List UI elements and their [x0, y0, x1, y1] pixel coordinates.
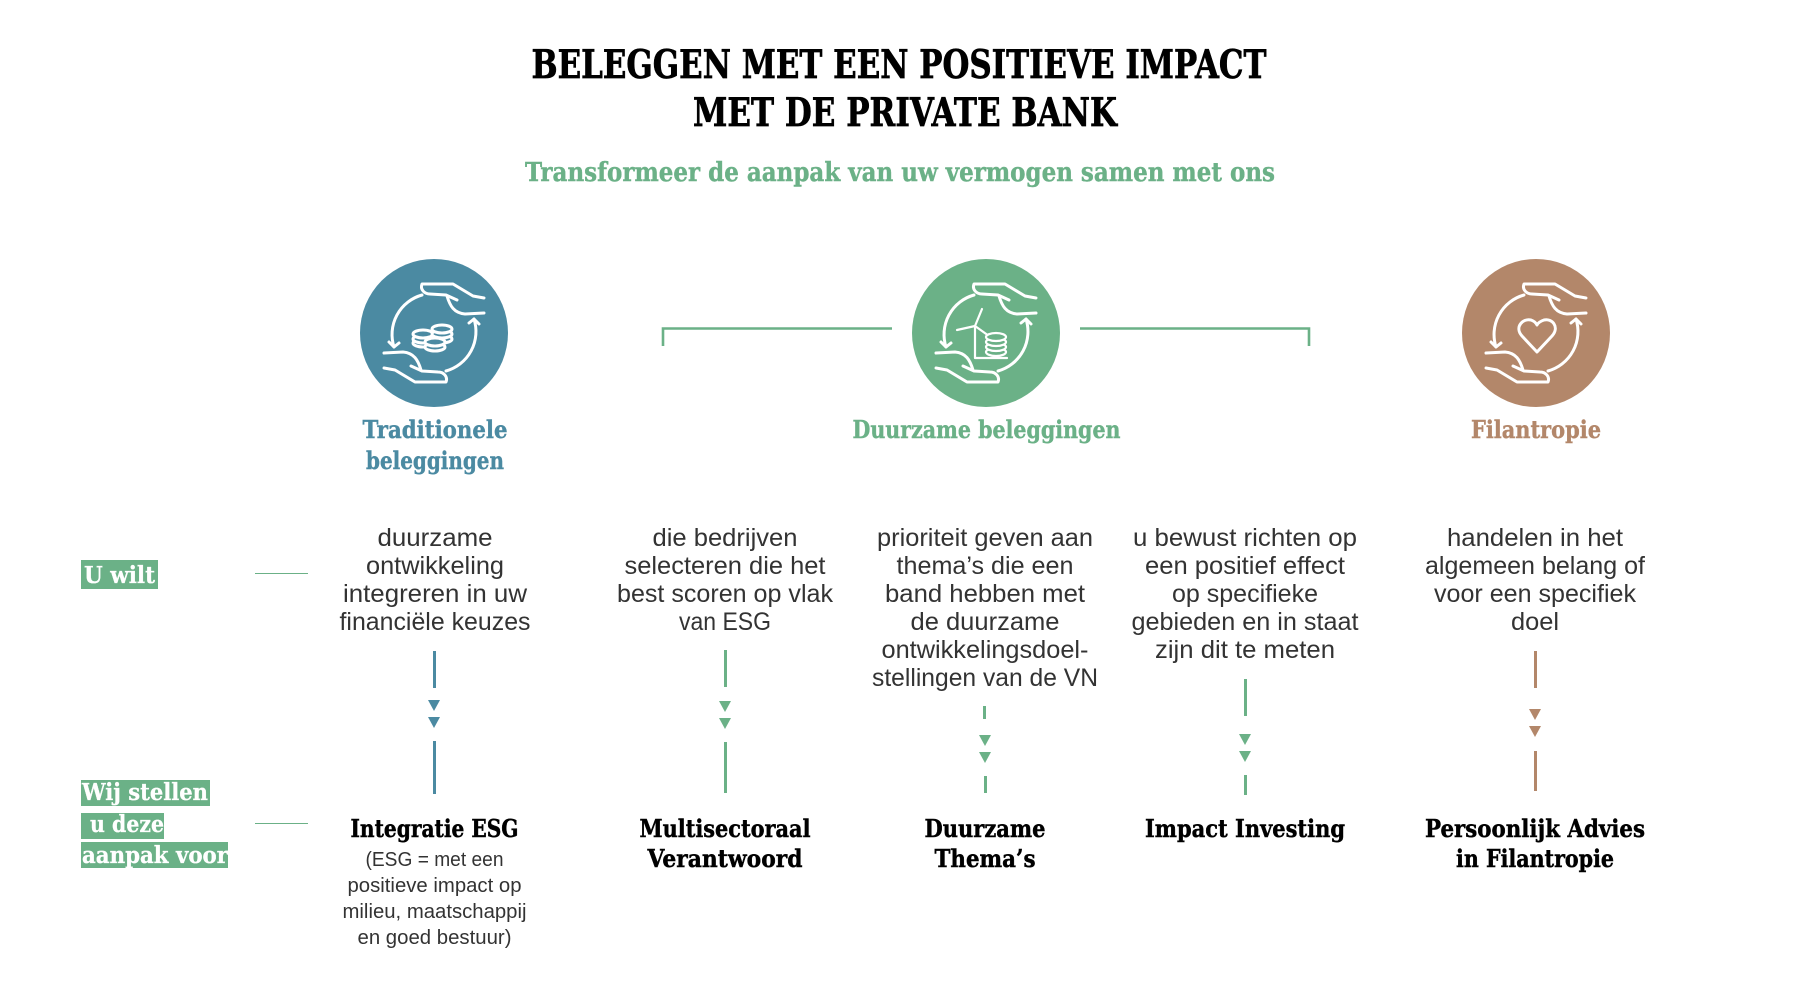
arrow: column 5: [1529, 651, 1541, 791]
note: ESG definition: en goed bestuur): [358, 927, 512, 949]
arrow: column 3: [979, 706, 991, 793]
arrow: column 2: [719, 650, 731, 793]
text block: selection wish: [617, 524, 833, 636]
text block: traditional wish: ontwikkeling: [366, 552, 504, 580]
panel: sustainable investments header: [852, 259, 1120, 444]
approach: Integratie ESG: Integratie ESG: [350, 814, 518, 843]
title: BELEGGEN MET EEN POSITIEVE IMPACT: [532, 42, 1266, 88]
approach: Impact Investing: Impact Investing: [1145, 814, 1345, 843]
approach: Duurzame Thema's: Duurzame: [924, 814, 1046, 843]
text block: themes wish: band hebben met: [885, 580, 1085, 608]
text block: traditional wish: financiële keuzes: [340, 608, 530, 636]
text block: philanthropy wish: voor een specifiek: [1434, 580, 1636, 608]
text block: impact wish: een positief effect: [1145, 552, 1345, 580]
text block: traditional wish: integreren in uw: [343, 580, 528, 608]
text block: impact wish: gebieden en in staat: [1132, 608, 1359, 636]
note: ESG definition: [342, 849, 526, 949]
panel: traditional investments header: [360, 259, 508, 475]
approach: Duurzame Thema's: [924, 814, 1046, 873]
text block: themes wish: prioriteit geven aan: [877, 524, 1093, 552]
row label: Wij stellen u deze aanpak voor: u deze: [90, 811, 164, 838]
text block: selection wish: best scoren op vlak: [617, 580, 833, 608]
text block: impact wish: [1132, 524, 1359, 664]
text block: themes wish: de duurzame: [910, 608, 1060, 636]
heading: traditional investments: [362, 415, 508, 475]
text block: philanthropy wish: [1425, 524, 1645, 636]
approach: Persoonlijk Advies in Filantropie: in Filantropie: [1456, 844, 1614, 873]
text block: themes wish: [872, 524, 1098, 692]
text block: impact wish: op specifieke: [1172, 580, 1318, 608]
subtitle: Transformeer de aanpak van uw vermogen samen met ons: [525, 158, 1275, 188]
approach: Duurzame Thema's: Thema’s: [934, 844, 1036, 873]
text block: impact wish: u bewust richten op: [1133, 524, 1357, 552]
heading: traditional investments: beleggingen: [366, 446, 504, 475]
icon: coins between hands: [360, 259, 508, 407]
text block: selection wish: selecteren die het: [624, 552, 826, 580]
approach: Persoonlijk Advies in Filantropie: Persoonlijk Advies: [1425, 814, 1645, 843]
bracket: left connector of sustainable investments: [663, 328, 892, 346]
text block: themes wish: ontwikkelingsdoel-: [882, 636, 1088, 664]
arrow: column 1: [428, 651, 440, 794]
heading: sustainable investments: Duurzame beleggingen: [852, 415, 1120, 444]
note: ESG definition: positieve impact op: [348, 875, 522, 897]
row label: Wij stellen u deze aanpak voor: [81, 779, 229, 869]
text block: philanthropy wish: handelen in het: [1447, 524, 1623, 552]
icon: heart between hands: [1462, 259, 1610, 407]
bracket: right connector of sustainable investments: [1080, 328, 1309, 346]
arrow: column 4: [1239, 679, 1251, 795]
title: [532, 42, 1266, 136]
approach: Multisectoraal Verantwoord: Verantwoord: [647, 844, 803, 873]
row label: U wilt: U wilt: [84, 562, 155, 589]
text block: traditional wish: duurzame: [378, 524, 492, 552]
icon: wind turbine and coins between hands: [912, 259, 1060, 407]
note: ESG definition: milieu, maatschappij: [342, 901, 526, 923]
note: ESG definition: (ESG = met een: [366, 849, 504, 871]
text block: selection wish: die bedrijven: [652, 524, 798, 552]
text block: traditional wish: [340, 524, 530, 636]
text block: themes wish: thema’s die een: [896, 552, 1074, 580]
row label: Wij stellen u deze aanpak voor: aanpak voor: [82, 842, 229, 869]
text block: philanthropy wish: doel: [1511, 608, 1559, 636]
row label: Wij stellen u deze aanpak voor: Wij stellen: [81, 779, 208, 806]
heading: philanthropy: Filantropie: [1471, 415, 1601, 444]
title: MET DE PRIVATE BANK: [693, 90, 1119, 136]
approach: Integratie ESG: [342, 814, 526, 949]
approach: Persoonlijk Advies in Filantropie: [1425, 814, 1645, 873]
text block: selection wish: van ESG: [679, 608, 771, 636]
approach: Multisectoraal Verantwoord: Multisectoraal: [640, 814, 810, 843]
text block: themes wish: stellingen van de VN: [872, 664, 1098, 692]
panel: philanthropy header: [1462, 259, 1610, 444]
heading: traditional investments: Traditionele: [362, 415, 508, 444]
text block: philanthropy wish: algemeen belang of: [1425, 552, 1645, 580]
text block: impact wish: zijn dit te meten: [1155, 636, 1335, 664]
approach: Multisectoraal Verantwoord: [640, 814, 810, 873]
